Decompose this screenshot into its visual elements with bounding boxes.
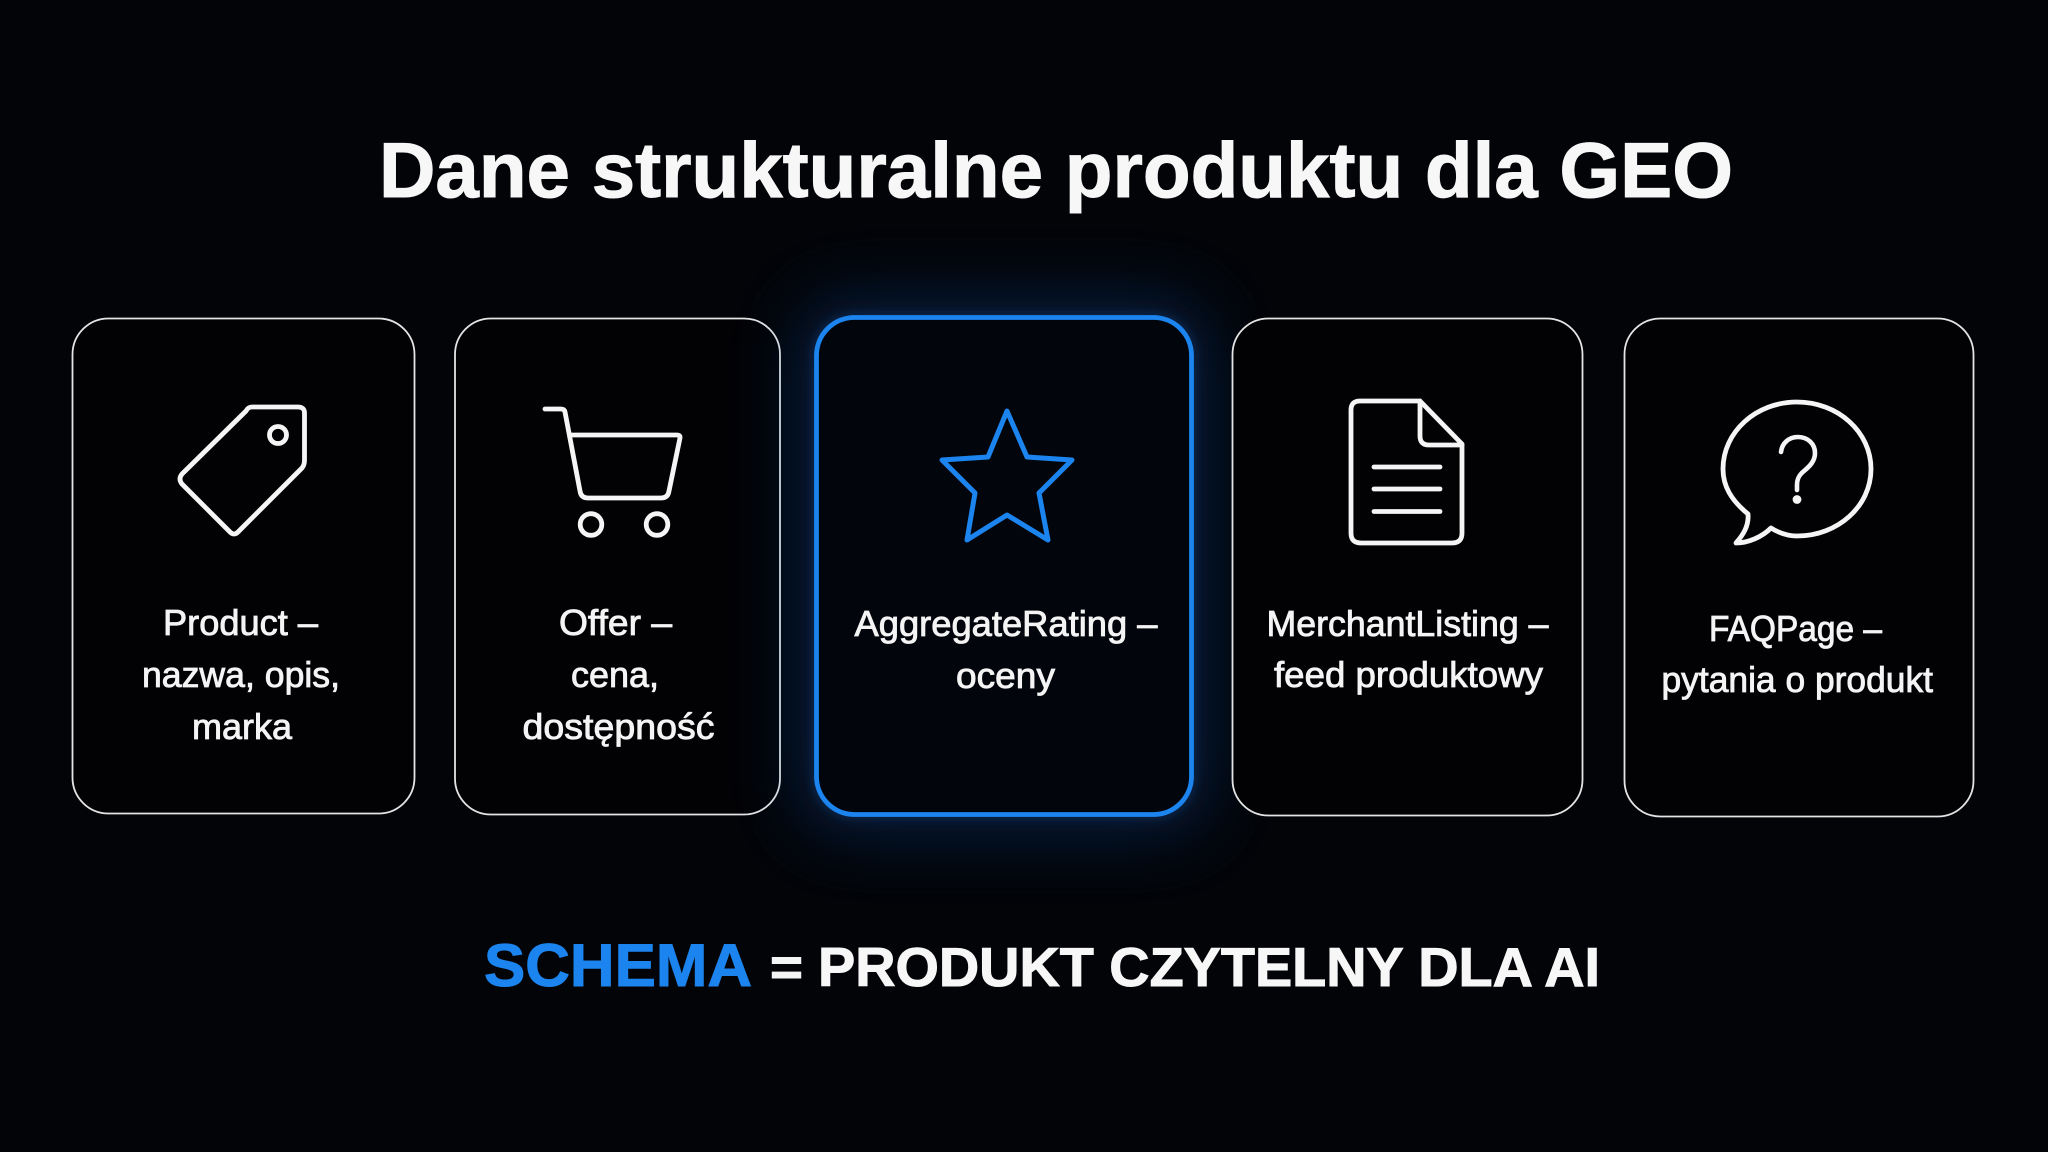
label: MerchantListing: MerchantListing – xyxy=(1266,603,1548,644)
label: AggregateRating: oceny xyxy=(956,655,1055,696)
icon: shopping cart xyxy=(545,409,680,535)
label: Offer: dostępność xyxy=(522,706,714,747)
tagline: SCHEMA: SCHEMA xyxy=(484,932,752,999)
icon: speech bubble with question mark xyxy=(1723,402,1871,543)
panel: FAQPage xyxy=(1624,318,1974,816)
panel: Product xyxy=(72,318,414,814)
label: Product: nazwa, opis, xyxy=(142,654,340,695)
panel: MerchantListing xyxy=(1232,318,1582,816)
label: Product: Product – xyxy=(163,602,318,643)
label: FAQPage xyxy=(1662,608,1933,700)
label: AggregateRating xyxy=(854,603,1158,696)
tagline: equals sign: = xyxy=(770,936,803,998)
label: Product xyxy=(142,602,340,747)
icon: price tag xyxy=(180,407,304,534)
label: AggregateRating: AggregateRating – xyxy=(854,603,1158,644)
label: Product: marka xyxy=(192,706,293,747)
title: Dane strukturalne produktu dla GEO xyxy=(379,126,1733,214)
label: Offer xyxy=(522,602,714,747)
panel: AggregateRating (highlighted) xyxy=(800,300,1208,832)
tagline: PRODUKT CZYTELNY DLA AI: PRODUKT CZYTELNY DLA AI xyxy=(818,936,1600,998)
label: MerchantListing xyxy=(1266,603,1548,695)
bottom tagline xyxy=(484,932,1600,999)
label: Offer: cena, xyxy=(571,654,659,695)
label: FAQPage: pytania o produkt xyxy=(1662,659,1933,700)
label: MerchantListing: feed produktowy xyxy=(1274,654,1543,695)
icon: document xyxy=(1351,401,1462,543)
label: FAQPage: FAQPage – xyxy=(1709,608,1882,649)
panel: Offer xyxy=(455,318,780,814)
icon: star xyxy=(942,411,1072,540)
label: Offer: Offer – xyxy=(559,602,672,643)
